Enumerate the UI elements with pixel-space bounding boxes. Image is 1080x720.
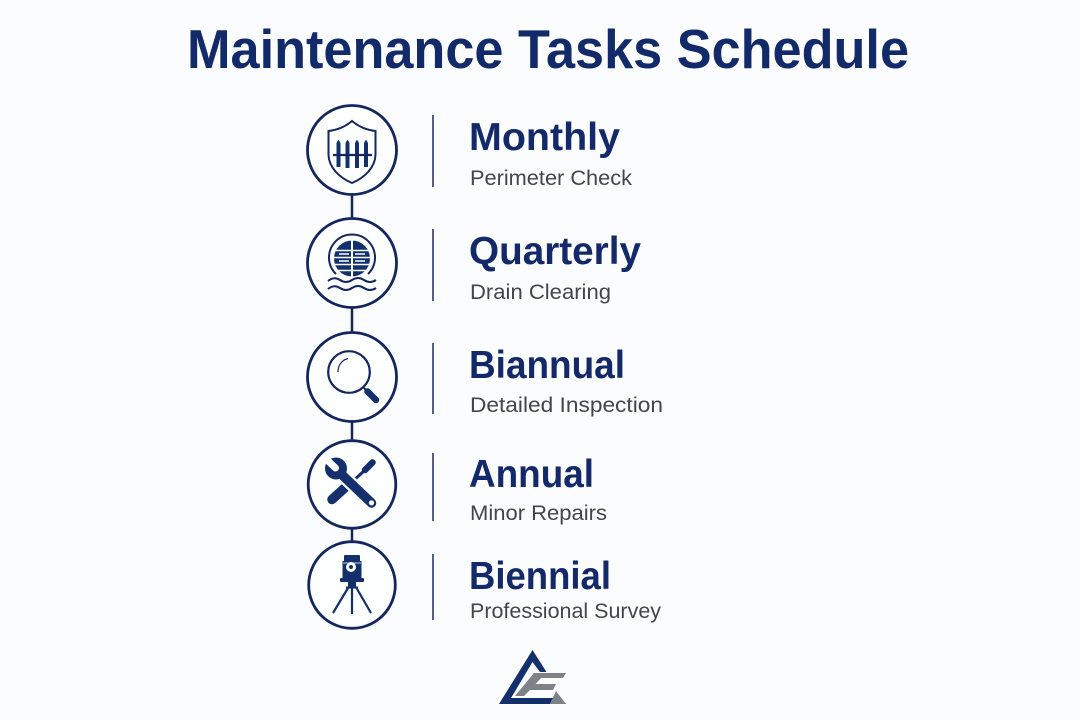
heading: biennial: Biennial [469, 555, 611, 598]
logo [499, 650, 566, 704]
row: annual [308, 441, 607, 528]
row: biannual [308, 332, 663, 422]
title: Maintenance Tasks Schedule [187, 18, 909, 80]
heading: biannual: Biannual [469, 344, 625, 387]
row: biennial [309, 542, 661, 628]
heading: quarterly: Quarterly [469, 230, 642, 273]
timeline connector [351, 195, 353, 542]
heading: annual: Annual [469, 453, 594, 496]
icon: drain with water [308, 218, 396, 308]
icon: surveying total station [309, 542, 395, 628]
label: detailed inspection: Detailed Inspection [470, 393, 663, 417]
icon: wrench and screwdriver [308, 441, 396, 528]
row: monthly [308, 106, 632, 194]
divider [432, 229, 434, 301]
icon: shield with fence [308, 106, 396, 194]
label: drain clearing: Drain Clearing [470, 280, 611, 304]
label: minor repairs: Minor Repairs [470, 501, 607, 525]
label: perimeter check: Perimeter Check [470, 166, 632, 190]
divider [432, 453, 434, 521]
label: professional survey: Professional Survey [470, 599, 661, 623]
row: quarterly [308, 218, 642, 308]
icon: magnifying glass [308, 332, 396, 422]
divider [432, 115, 434, 187]
divider [432, 343, 434, 414]
heading: monthly: Monthly [469, 116, 621, 159]
divider [432, 554, 434, 620]
